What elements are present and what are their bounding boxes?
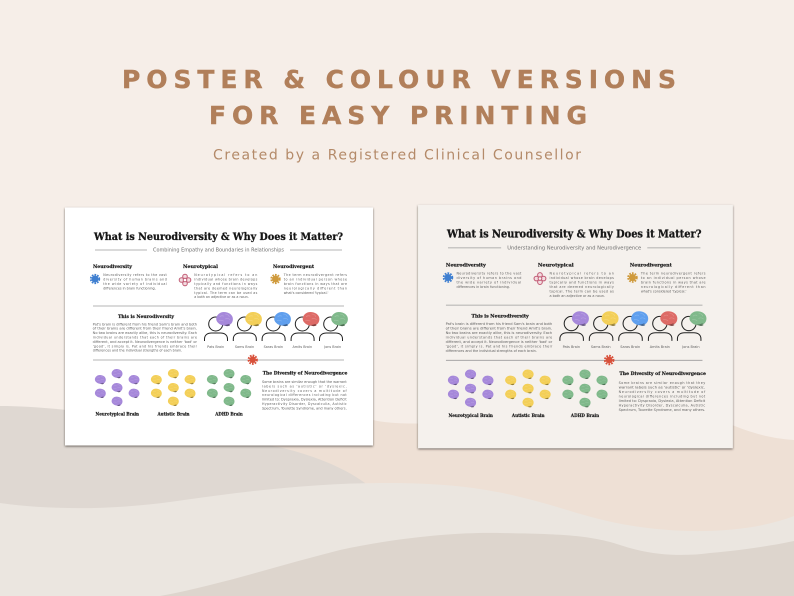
text block: diversity of neurodivergence: Spectrum, Tourette Syndrome, and many others. [619,408,705,412]
definition: neurodivergent [628,262,706,294]
panel: colour poster [418,205,733,448]
background: peach wave [0,400,794,596]
text block: this is neurodiversity: different, and accept it. Neurodivergence is neither 'bad' or [446,340,553,344]
text block: this is neurodiversity: of their brains are different from their friend Amit's brain. [93,327,197,331]
definition: neurotypical: individual whose brain develops [549,276,614,280]
definition: neurodivergent: to an individual person whose [284,278,347,282]
background: cream wave [0,483,794,596]
text block: this is neurodiversity: 'good', it simply is. Pat and his friends embrace their [93,344,198,348]
text block: this is neurodiversity: 'good', it simply is. Pat and his friends embrace their [446,344,553,348]
people with brains: Jons Brain [681,345,700,349]
text block: diversity of neurodivergence: Neurodiversity covers a multitude of [619,390,706,394]
text block: this is neurodiversity: differences and the individual strengths of each brain. [446,349,537,353]
brain cluster: neurotypical: Neurotypical Brain [96,412,140,418]
definition: neurotypical [534,262,614,298]
brain cluster: autistic: Autistic Brain [511,413,545,419]
text block: this is neurodiversity: of their brains are different from their friend Amit's brain. [446,326,552,330]
definition: neurotypical: Neurotypical refers to an [549,272,614,276]
definition: neurodiversity: the wide variety of individual [456,281,521,285]
brain cluster: neurotypical [95,369,140,418]
definition: neurotypical: Neurotypical [538,262,574,268]
definition: neurodiversity [91,264,168,290]
definition: neurotypical [179,264,258,299]
text block: diversity of neurodivergence: neurological differences including but not [262,393,347,397]
people with brains: Sams Brain [235,345,254,349]
text block: diversity of neurodivergence: neurological differences including but not [619,394,706,398]
text block: this is neurodiversity: differences and the individual strengths of each brain. [93,349,182,353]
definition: neurodiversity [444,262,522,289]
brain cluster: neurotypical: Neurotypical Brain [449,413,493,419]
people with brains: Amits Brain [292,345,312,349]
people with brains: Amits Brain [650,345,670,349]
background: dark bottom wave [160,533,794,596]
text block: this is neurodiversity [93,314,198,353]
definition: neurodivergent: The term neurodivergent refers [640,272,706,276]
heading: POSTER & COLOUR VERSIONS [122,65,676,94]
definition: neurodiversity: Neurodiversity [446,262,486,268]
subheading: Created by a Registered Clinical Counsellor [213,148,581,164]
people with brains [204,312,348,349]
text block: this is neurodiversity: This is Neurodiversity [118,314,174,320]
definition: neurotypical: Neurotypical [183,264,218,270]
definition: neurodiversity: Neurodiversity refers to the vast [456,272,522,276]
text block: this is neurodiversity: individual understands that each of their brains are [93,336,197,340]
text block: diversity of neurodivergence: Spectrum, Tourette Syndrome, and many others. [262,406,347,410]
brain cluster: adhd [207,369,251,418]
brain cluster: adhd: ADHD Brain [214,412,243,418]
people with brains: Saras Brain [620,345,640,349]
people with brains: Sams Brain [591,345,611,349]
text block: diversity of neurodivergence: The Diversity of Neurodivergence [619,371,706,377]
definition: neurodivergent: neurologically different than [641,285,706,289]
definition: neurotypical: typically and functions in ways [549,281,614,285]
people with brains [560,311,706,349]
text block: this is neurodiversity: This is Neurodiversity [471,313,529,319]
brain cluster: autistic [151,369,196,418]
definition: neurodivergent: to an individual person whose [641,276,706,280]
people with brains: Saras Brain [264,345,283,349]
text block: diversity of neurodivergence: limited to: Dyspraxia, Dyslexia, Attention Deficit [262,398,347,402]
poster subtitle: Understanding Neurodiversity and Neurodivergence [507,245,641,251]
background: grey wave [0,406,365,540]
icon: red gear [248,356,257,364]
definition: neurodiversity: Neurodiversity refers to the vast [103,273,168,277]
text block: this is neurodiversity: No two brains are exactly alike, this is neurodiversity. Each [446,331,552,335]
panel: white poster [65,208,373,446]
text block: this is neurodiversity: Pat's brain is different from his friend Sam's brain and both [446,322,552,326]
definition: neurotypical: that are deemed neurologically [549,285,614,289]
brain cluster: adhd [562,369,608,419]
text block: this is neurodiversity [446,313,553,353]
brain cluster: neurotypical [448,369,493,419]
definition: neurotypical: typical. The term can be used as [549,290,614,294]
text block: diversity of neurodivergence [619,371,706,412]
definition: neurotypical: individual whose brain develops [194,278,258,282]
people with brains: Pats Brain [207,345,224,349]
brain cluster: autistic: Autistic Brain [157,412,190,418]
definition: neurodiversity: differences in brain functioning. [103,286,156,290]
definition: neurodivergent: brain functions in ways that are [284,282,347,286]
definition: neurodiversity: differences in brain functioning. [456,285,510,289]
definition: neurotypical: a both an adjective or as a noun. [549,294,605,298]
definition: neurodiversity: the wide variety of individual [103,282,167,286]
definition: neurodivergent: Neurodivergent [273,264,315,270]
heading [122,65,676,130]
text block: diversity of neurodivergence: labels such as 'autistic' or 'dyslexic. [262,384,347,388]
text block: diversity of neurodivergence: warrant labels such as 'autistic' or 'dyslexic. [619,385,705,389]
definition: neurotypical: that are deemed neurologically [194,286,257,290]
brain cluster: adhd: ADHD Brain [570,413,599,419]
poster title: What is Neurodiversity & Why Does it Matter? [446,228,701,241]
text block: diversity of neurodivergence: Hyperactivity Disorder, Dyscalculia, Autistic [262,402,347,406]
definition: neurotypical: a both an adjective or as a noun. [194,295,249,299]
text block: diversity of neurodivergence: Some brains are similar enough that the warrant [262,380,347,384]
text block: this is neurodiversity: Pat's brain is different from his friend Sam's brain and both [93,322,197,326]
icon: red gear [605,356,613,364]
text block: this is neurodiversity: different, and accept it. Neurodivergence is neither 'bad' or [93,340,198,344]
definition: neurodivergent: brain functions in ways that are [641,281,706,285]
definition: neurotypical: Neurotypical refers to an [194,273,257,277]
definition: neurotypical: typically and functions in ways [194,282,258,286]
poster subtitle: Combining Empathy and Boundaries in Relationships [153,248,285,254]
poster title: What is Neurodiversity & Why Does it Matter? [93,231,343,243]
text block: diversity of neurodivergence: The Diversity of Neurodivergence [263,370,347,376]
definition: neurodivergent: what's considered 'typical.' [284,291,329,295]
text block: this is neurodiversity: individual understands that each of their brains are [446,335,552,339]
text block: this is neurodiversity: No two brains are exactly alike, this is neurodiversity. Each [93,331,197,335]
definition: neurodivergent: neurologically different than [284,286,347,290]
text block: diversity of neurodivergence: Neurodiversity covers a multitude of [262,389,348,393]
definition: neurodivergent: Neurodivergent [630,262,673,268]
text block: diversity of neurodivergence: limited to: Dyspraxia, Dyslexia, Attention Deficit [619,399,706,403]
text block: diversity of neurodivergence [262,370,348,410]
definition: neurodiversity: diversity of human brains and [456,276,521,280]
definition: neurotypical: typical. The term can be used as [194,291,258,295]
definition: neurodivergent: what's considered 'typical.' [641,290,687,294]
people with brains: Pats Brain [563,345,580,349]
definition: neurodivergent: The term neurodivergent refers [283,273,347,277]
text block: diversity of neurodivergence: Hyperactivity Disorder, Dyscalculia, Autistic [619,403,705,407]
brain cluster: autistic [505,369,551,419]
people with brains: Jons Brain [323,345,341,349]
text block: diversity of neurodivergence: Some brains are similar enough that they [619,381,705,385]
definition: neurodivergent [271,264,347,295]
heading: FOR EASY PRINTING [209,101,587,130]
definition: neurodiversity: diversity of human brains and [103,278,167,282]
definition: neurodiversity: Neurodiversity [93,264,132,270]
